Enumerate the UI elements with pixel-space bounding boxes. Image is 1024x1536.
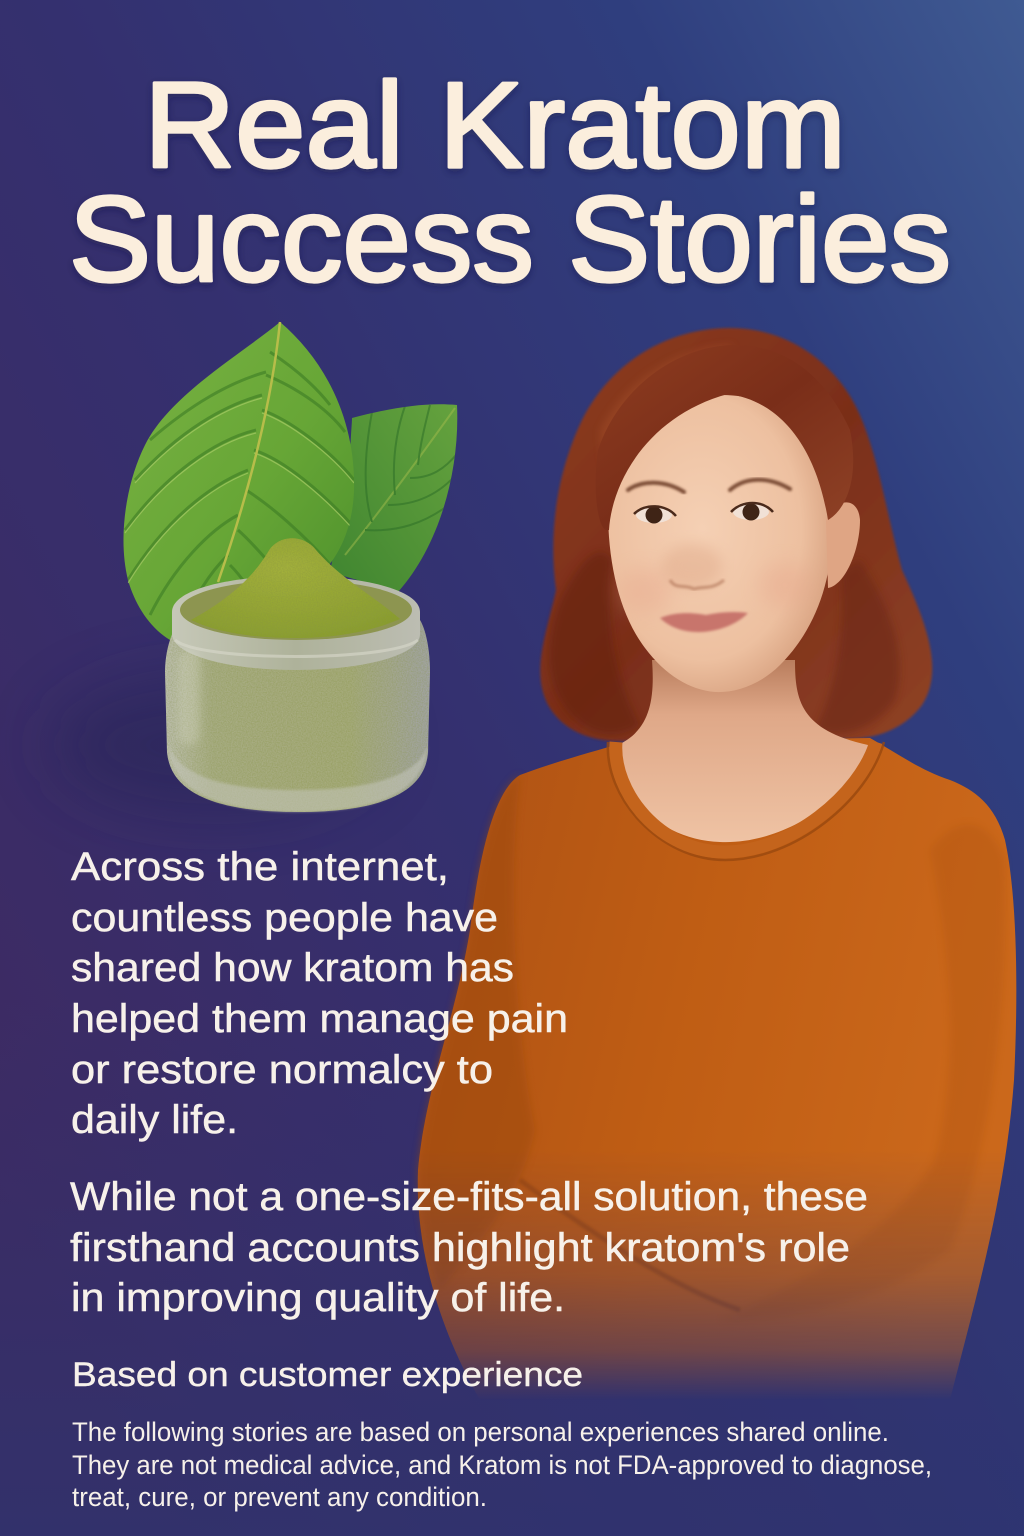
neck and chest xyxy=(618,660,868,842)
icon: jar xyxy=(165,576,430,812)
nose xyxy=(662,544,724,589)
illustration: kratom leaves and powder jar xyxy=(93,322,458,814)
paragraph: intro: Across the internet, xyxy=(71,845,449,889)
hair back xyxy=(540,328,932,741)
mouth xyxy=(660,612,748,632)
paragraph: intro: countless people have xyxy=(71,896,498,940)
sweater collar xyxy=(608,742,884,860)
title: Real Kratom xyxy=(144,57,846,193)
paragraph: intro: shared how kratom has xyxy=(71,946,514,990)
ear xyxy=(826,502,860,588)
paragraph: intro: daily life. xyxy=(71,1098,238,1142)
icon: front leaf xyxy=(123,322,354,640)
paragraph: firsthand accounts: While not a one-size-fits-all solution, these xyxy=(70,1175,868,1219)
disclaimer: treat, cure, or prevent any condition. xyxy=(72,1482,487,1512)
eyes xyxy=(634,503,773,524)
hair fringe xyxy=(596,345,853,530)
paragraph: intro xyxy=(71,845,568,1142)
paragraph: intro: helped them manage pain xyxy=(71,997,568,1041)
illustration: woman portrait xyxy=(418,328,1016,1400)
icon: back leaf xyxy=(330,404,460,592)
paragraph: firsthand accounts: firsthand accounts highlight kratom's role xyxy=(70,1226,850,1270)
subheading: Based on customer experience xyxy=(72,1356,583,1394)
paragraph: intro: or restore normalcy to xyxy=(71,1048,493,1092)
hair shading xyxy=(549,552,640,735)
icon: powder mound xyxy=(191,538,400,638)
cheek blush xyxy=(619,563,811,612)
paragraph: firsthand accounts: in improving quality of life. xyxy=(71,1276,565,1320)
disclaimer xyxy=(72,1417,932,1512)
face xyxy=(608,395,832,692)
disclaimer: The following stories are based on personal experiences shared online. xyxy=(72,1417,889,1447)
paragraph: firsthand accounts xyxy=(70,1175,868,1320)
jar shadow xyxy=(50,675,380,815)
disclaimer: They are not medical advice, and Kratom is not FDA-approved to diagnose, xyxy=(72,1450,932,1480)
eyebrows xyxy=(628,480,790,492)
title: Success Stories xyxy=(69,171,951,307)
title xyxy=(69,57,951,307)
sweater xyxy=(418,738,1016,1400)
